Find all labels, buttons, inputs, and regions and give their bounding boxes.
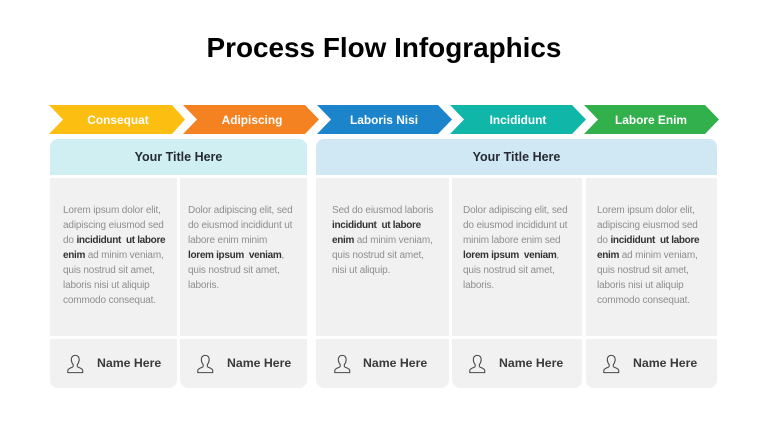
- text block: column 4: [463, 204, 568, 290]
- panel: column 5 body: [586, 178, 717, 336]
- text block: column 3: [332, 204, 433, 276]
- name label 4: Name Here: [499, 356, 563, 370]
- text block: column 4: lorem ipsum veniam,: [463, 250, 559, 260]
- arrow: Adipiscing: Adipiscing: [222, 113, 282, 127]
- text block: column 5: quis nostrud sit amet,: [597, 264, 689, 276]
- text block: column 1: enim ad minim veniam,: [63, 250, 164, 260]
- icon: person 5: [603, 354, 620, 374]
- heading panel: left group: [50, 139, 307, 175]
- panel: column 2 footer: [180, 339, 307, 388]
- name label 3: Name Here: [363, 356, 427, 370]
- text block: column 2: labore enim minim: [188, 234, 267, 246]
- text block: column 5: commodo consequat.: [597, 294, 690, 306]
- text block: column 2: quis nostrud sit amet,: [188, 264, 280, 276]
- process arrows: [49, 105, 719, 134]
- text block: column 1: laboris nisi ut aliquip: [63, 280, 150, 290]
- panel: column 2 body: [180, 178, 307, 336]
- text block: column 1: quis nostrud sit amet,: [63, 264, 155, 276]
- panel: column 4 footer: [452, 339, 582, 388]
- title: Process Flow Infographics: [207, 32, 561, 63]
- text block: column 3: Sed do eiusmod laboris: [332, 204, 433, 216]
- text block: column 2: Dolor adipiscing elit, sed: [188, 204, 292, 216]
- text block: column 5: adipiscing eiusmod sed: [597, 220, 698, 230]
- text block: column 3: incididunt ut labore: [332, 220, 421, 230]
- text block: column 5: laboris nisi ut aliquip: [597, 280, 684, 290]
- arrow: Consequat: Consequat: [87, 113, 149, 127]
- name label 1: Name Here: [97, 356, 161, 370]
- text block: column 1: [63, 204, 166, 306]
- arrow: Labore Enim: [584, 105, 719, 134]
- arrow: Adipiscing: [183, 105, 319, 134]
- panel: column 3 footer: [316, 339, 449, 388]
- panel: column 4 body: [452, 178, 582, 336]
- text block: column 5: Lorem ipsum dolor elit,: [597, 204, 695, 216]
- text block: column 2: lorem ipsum veniam,: [188, 250, 284, 260]
- text block: column 2: do eiusmod incididunt ut: [188, 220, 292, 230]
- text block: column 4: Dolor adipiscing elit, sed: [463, 204, 568, 216]
- text block: column 5: [597, 204, 700, 306]
- text block: column 2: laboris.: [188, 280, 219, 290]
- heading panel: left group: Your Title Here: [135, 150, 222, 164]
- text block: column 1: commodo consequat.: [63, 294, 156, 306]
- text block: column 4: quis nostrud sit amet,: [463, 264, 555, 276]
- panel: column 1 body: [50, 178, 177, 336]
- name label 5: Name Here: [633, 356, 697, 370]
- text block: column 2: [188, 204, 292, 290]
- arrow: Laboris Nisi: [317, 105, 452, 134]
- arrow: Labore Enim: Labore Enim: [615, 113, 687, 127]
- text block: column 3: nisi ut aliquip.: [332, 264, 390, 276]
- panel: column 1 footer: [50, 339, 177, 388]
- name label 2: Name Here: [227, 356, 291, 370]
- text block: column 3: enim ad minim veniam,: [332, 234, 433, 246]
- icon: person 4: [469, 354, 486, 374]
- text block: column 5: do incididunt ut labore: [597, 234, 699, 246]
- text block: column 5: enim ad minim veniam,: [597, 250, 698, 260]
- arrow: Incididunt: Incididunt: [490, 113, 546, 127]
- text block: column 1: do incididunt ut labore: [63, 234, 165, 246]
- icon: person 1: [67, 354, 84, 374]
- text block: column 4: laboris.: [463, 280, 494, 290]
- panel: column 3 body: [316, 178, 449, 336]
- text block: column 4: minim labore enim sed: [463, 234, 560, 246]
- arrow: Laboris Nisi: Laboris Nisi: [350, 113, 418, 127]
- text block: column 4: do eiusmod incididunt ut: [463, 220, 567, 230]
- icon: person 2: [197, 354, 214, 374]
- heading panel: right group: [316, 139, 717, 175]
- heading panel: right group: Your Title Here: [473, 150, 560, 164]
- icon: person 3: [334, 354, 350, 374]
- text block: column 1: adipiscing eiusmod sed: [63, 220, 164, 230]
- arrow: Consequat: [49, 105, 185, 134]
- arrow: Incididunt: [450, 105, 586, 134]
- text block: column 1: Lorem ipsum dolor elit,: [63, 204, 161, 216]
- panel: column 5 footer: [586, 339, 717, 388]
- text block: column 3: quis nostrud sit amet,: [332, 250, 424, 260]
